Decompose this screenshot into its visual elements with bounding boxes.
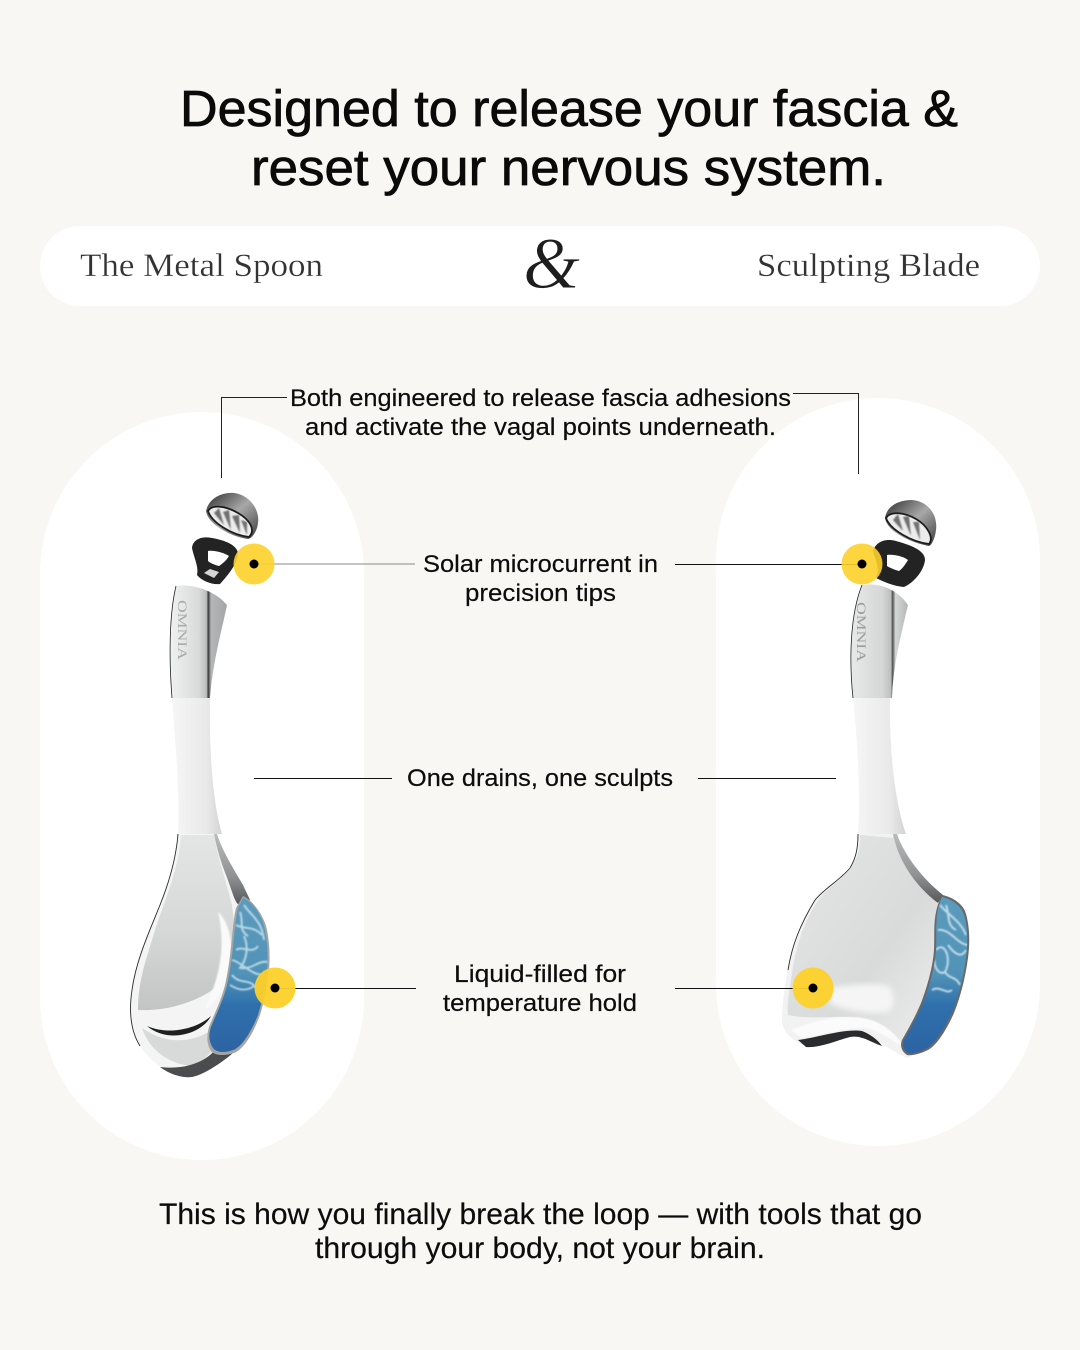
title: reset your nervous system. — [251, 139, 886, 196]
icon: ampersand: & — [523, 223, 580, 304]
callout: one drains one sculpts: One drains, one sculpts — [407, 765, 673, 792]
panel: left capsule — [40, 412, 364, 1160]
icon: blade dome cap — [885, 500, 936, 546]
callout: liquid-filled — [254, 961, 834, 1017]
marker right — [792, 968, 834, 1008]
title: Designed to release your fascia & — [180, 80, 958, 137]
marker left — [254, 968, 296, 1008]
text: solar microcurrent: precision tips — [465, 580, 616, 607]
spoon white neck — [172, 698, 222, 834]
blade dark underside — [798, 1030, 882, 1047]
upper left black rim — [788, 834, 858, 970]
title — [180, 80, 958, 196]
leader line right — [675, 988, 813, 990]
text: solar microcurrent: Solar microcurrent in — [423, 551, 658, 578]
outer silver — [782, 834, 968, 1058]
leader line left — [275, 988, 416, 990]
right chrome strip — [893, 834, 943, 903]
bright crescent — [205, 912, 232, 1010]
groove highlight — [830, 984, 894, 1013]
lower reflection — [142, 1028, 218, 1066]
spoon handle rim line — [170, 586, 176, 698]
callout: solar microcurrent — [234, 544, 882, 607]
text: solar microcurrent — [423, 551, 658, 607]
bottom chrome shadow — [160, 1046, 240, 1077]
dark crescent — [147, 1016, 211, 1035]
illustration: sculpting blade — [782, 500, 975, 1060]
illustration: metal spoon — [130, 493, 275, 1077]
lower reflection — [791, 1017, 902, 1046]
text: The Metal Spoon: The Metal Spoon — [80, 248, 323, 284]
text: engineered callout: Both engineered to release fascia adhesions — [290, 385, 791, 412]
leader line left — [254, 563, 415, 565]
left black rim — [131, 834, 178, 1046]
leader line right — [675, 564, 862, 566]
text: engineered callout — [290, 385, 791, 441]
blade blue water panel — [901, 895, 970, 1056]
text: closing statement: This is how you finally break the loop — with tools that go — [159, 1198, 922, 1231]
text: engineered callout: and activate the vagal points underneath. — [305, 414, 776, 441]
marker left — [234, 544, 274, 584]
blade handle rim line — [851, 585, 862, 698]
text: liquid-filled — [443, 961, 637, 1017]
blade metal handle top — [851, 584, 908, 698]
blade head — [782, 834, 968, 1058]
text: liquid-filled: temperature hold — [443, 990, 637, 1017]
icon: blade dark ring — [873, 540, 925, 587]
panel: right capsule — [716, 398, 1040, 1146]
panel: product names banner — [40, 223, 1040, 306]
spoon head — [130, 834, 268, 1077]
text: closing statement — [159, 1198, 922, 1265]
bowl — [138, 835, 234, 1010]
scoop — [788, 835, 938, 1045]
marker right — [842, 544, 882, 584]
outer silver — [130, 834, 268, 1076]
text: liquid-filled: Liquid-filled for — [454, 961, 626, 988]
spoon engraved logo: OMNIA — [175, 600, 190, 661]
icon: spoon dome cap — [206, 493, 258, 539]
arrow: left bracket connector — [222, 398, 287, 478]
right chrome strip — [214, 834, 250, 905]
blade engraved logo: OMNIA — [854, 602, 869, 663]
text: closing statement: through your body, not your brain. — [315, 1232, 765, 1265]
spoon metal handle top — [170, 585, 227, 698]
arrow: right bracket connector — [793, 394, 858, 474]
text: Sculpting Blade: Sculpting Blade — [757, 248, 980, 284]
blade white neck — [853, 698, 906, 834]
icon: spoon dark ring — [192, 537, 238, 584]
spoon blue water panel — [207, 896, 270, 1055]
